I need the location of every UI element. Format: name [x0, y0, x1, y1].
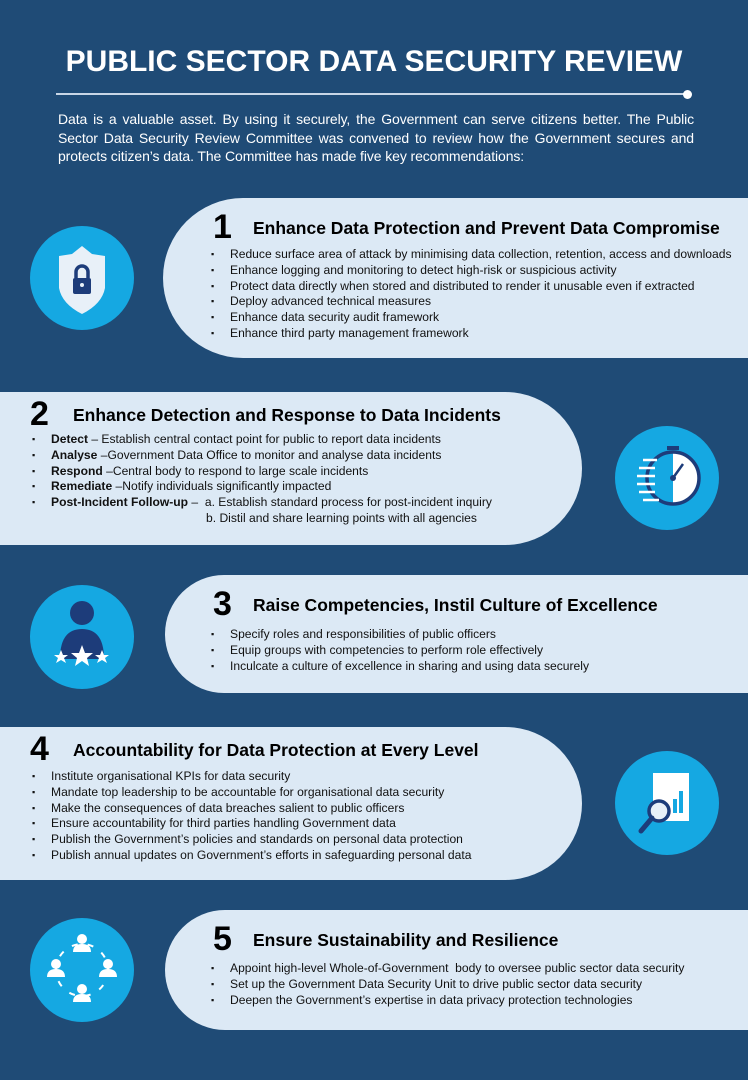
- icon: person with stars: [30, 585, 134, 689]
- bullets 5: Appoint high-level Whole-of-Government body to oversee public sector data security: [230, 961, 684, 975]
- bullets 3: [211, 627, 589, 673]
- bullets 2: Post-Incident Follow-up – a. Establish standard process for post-incident inquiry: [51, 495, 492, 509]
- icon: report with magnifier: [615, 751, 719, 855]
- bullets 1: Reduce surface area of attack by minimising data collection, retention, access and downloads: [230, 247, 732, 261]
- panel 3: [165, 575, 748, 693]
- bullets 1: Enhance third party management framework: [230, 326, 469, 340]
- bullets 2: Detect – Establish central contact point for public to report data incidents: [51, 432, 441, 446]
- bullets 5: Deepen the Government’s expertise in data privacy protection technologies: [230, 993, 632, 1007]
- title: PUBLIC SECTOR DATA SECURITY REVIEW: [66, 45, 682, 78]
- bullets 4: Mandate top leadership to be accountable for organisational data security: [51, 785, 444, 799]
- bullets 4: Publish the Government’s policies and standards on personal data protection: [51, 832, 463, 846]
- panel 2: [0, 392, 582, 545]
- bullets 3: Specify roles and responsibilities of public officers: [230, 627, 496, 641]
- bullets 4: Publish annual updates on Government’s efforts in safeguarding personal data: [51, 848, 471, 862]
- intro text: Data is a valuable asset. By using it securely, the Government can serve citizens better. The Public Sector Data Security Review Committee was convened to review how the Government secures and protects citizen’s data. The Committee has made five key recommendations:: [58, 111, 694, 164]
- bullets 2: Remediate –Notify individuals significantly impacted: [51, 479, 331, 493]
- bullets 1: Enhance logging and monitoring to detect high-risk or suspicious activity: [230, 263, 617, 277]
- bullets 2: Analyse –Government Data Office to monitor and analyse data incidents: [51, 448, 441, 462]
- panel 1: 1: [213, 208, 232, 246]
- bullets 1: [211, 247, 732, 340]
- bullets 1: Enhance data security audit framework: [230, 310, 439, 324]
- icon: shield lock: [30, 226, 134, 330]
- panel 4: [0, 727, 582, 880]
- bullets 1: Protect data directly when stored and distributed to render it unusable even if extracted: [230, 279, 695, 293]
- heading 1: Enhance Data Protection and Prevent Data Compromise: [253, 218, 720, 238]
- bullets 5: [211, 961, 684, 1007]
- bullets 3: Inculcate a culture of excellence in sharing and using data securely: [230, 659, 589, 673]
- bullets 4: Ensure accountability for third parties handling Government data: [51, 816, 396, 830]
- bullets 3: Equip groups with competencies to perform role effectively: [230, 643, 543, 657]
- bullets 2: Respond –Central body to respond to large scale incidents: [51, 464, 368, 478]
- bullets 4: Institute organisational KPIs for data security: [51, 769, 290, 783]
- heading 5: Ensure Sustainability and Resilience: [253, 930, 558, 950]
- heading 3: Raise Competencies, Instil Culture of Excellence: [253, 595, 658, 615]
- title underline: [56, 90, 692, 99]
- panel 2: 2: [30, 395, 49, 433]
- icon: stopwatch: [615, 426, 719, 530]
- bullets 1: Deploy advanced technical measures: [230, 294, 431, 308]
- icon: network of people: [30, 918, 134, 1022]
- bullets 2: [32, 432, 492, 525]
- panel 4: 4: [30, 730, 49, 768]
- panel 3: 3: [213, 585, 232, 623]
- bullets 2: b. Distil and share learning points with all agencies: [206, 511, 477, 525]
- heading 2: Enhance Detection and Response to Data Incidents: [73, 405, 501, 425]
- bullets 4: [32, 769, 472, 862]
- bullets 5: Set up the Government Data Security Unit to drive public sector data security: [230, 977, 642, 991]
- panel 1: [163, 198, 748, 358]
- panel 5: 5: [213, 920, 232, 958]
- bullets 4: Make the consequences of data breaches salient to public officers: [51, 801, 404, 815]
- heading 4: Accountability for Data Protection at Every Level: [73, 740, 479, 760]
- panel 5: [165, 910, 748, 1030]
